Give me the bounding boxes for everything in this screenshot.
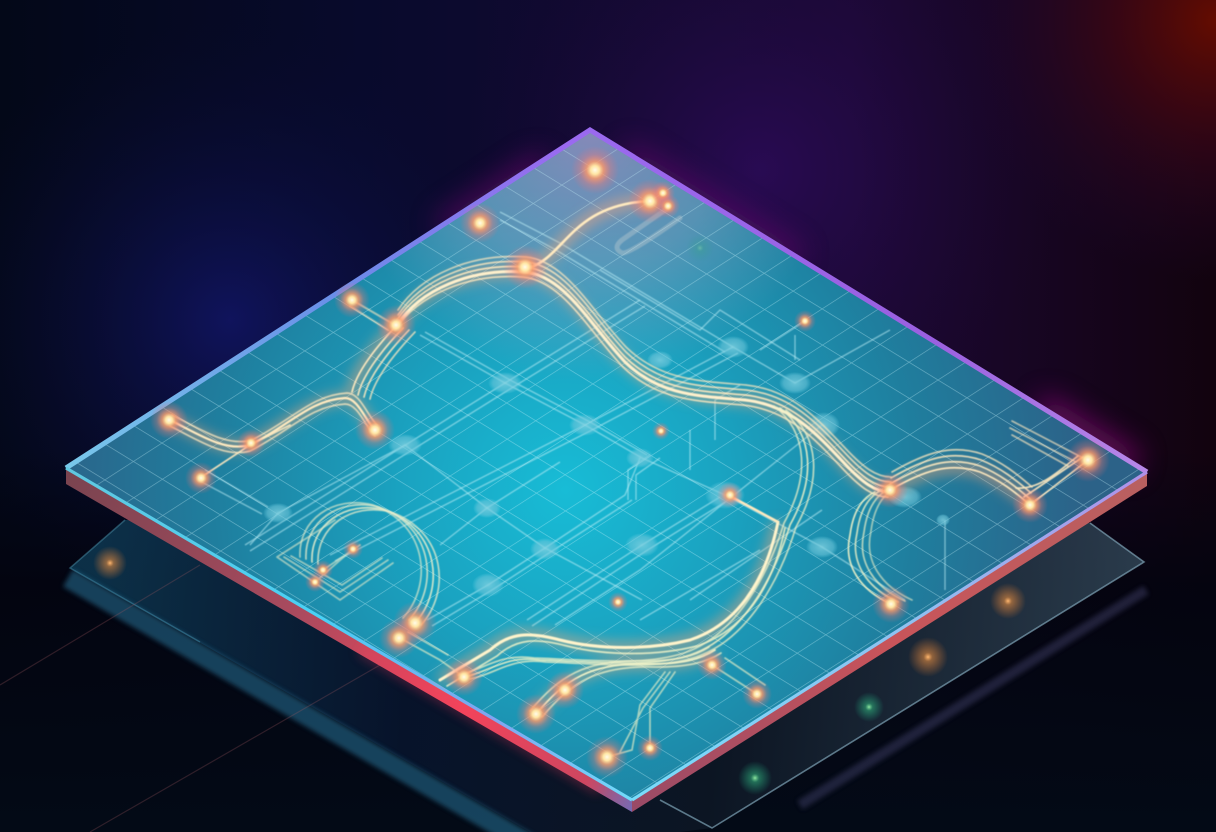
top bundle [528, 201, 680, 268]
bottom branch bundles [400, 632, 765, 757]
glow beneath traces [170, 201, 1030, 714]
reflected light streaks [0, 565, 380, 832]
glowing nodes [150, 146, 1110, 778]
large bottom arc bundle [440, 406, 814, 686]
right bundle [890, 421, 1088, 505]
faint circuit network [198, 212, 945, 626]
circuit hubs [263, 336, 950, 597]
glowing trace bundles [170, 201, 1088, 757]
lower-left coil bundle [277, 503, 439, 625]
right arc bundle [848, 488, 912, 604]
glass plate surface [66, 130, 1147, 800]
reflected band right [800, 590, 1146, 805]
main S-curve bundle [395, 257, 891, 497]
left arc bundle [350, 300, 415, 399]
red rim glow [360, 650, 600, 790]
plate edge highlights [66, 130, 1147, 800]
reflected band left [68, 578, 540, 832]
plate rim [66, 468, 1147, 812]
far left bundle [170, 393, 377, 478]
reflected lights [93, 546, 1026, 795]
lower reflected plate [0, 520, 1146, 832]
plate ambient glow [440, 150, 1135, 465]
